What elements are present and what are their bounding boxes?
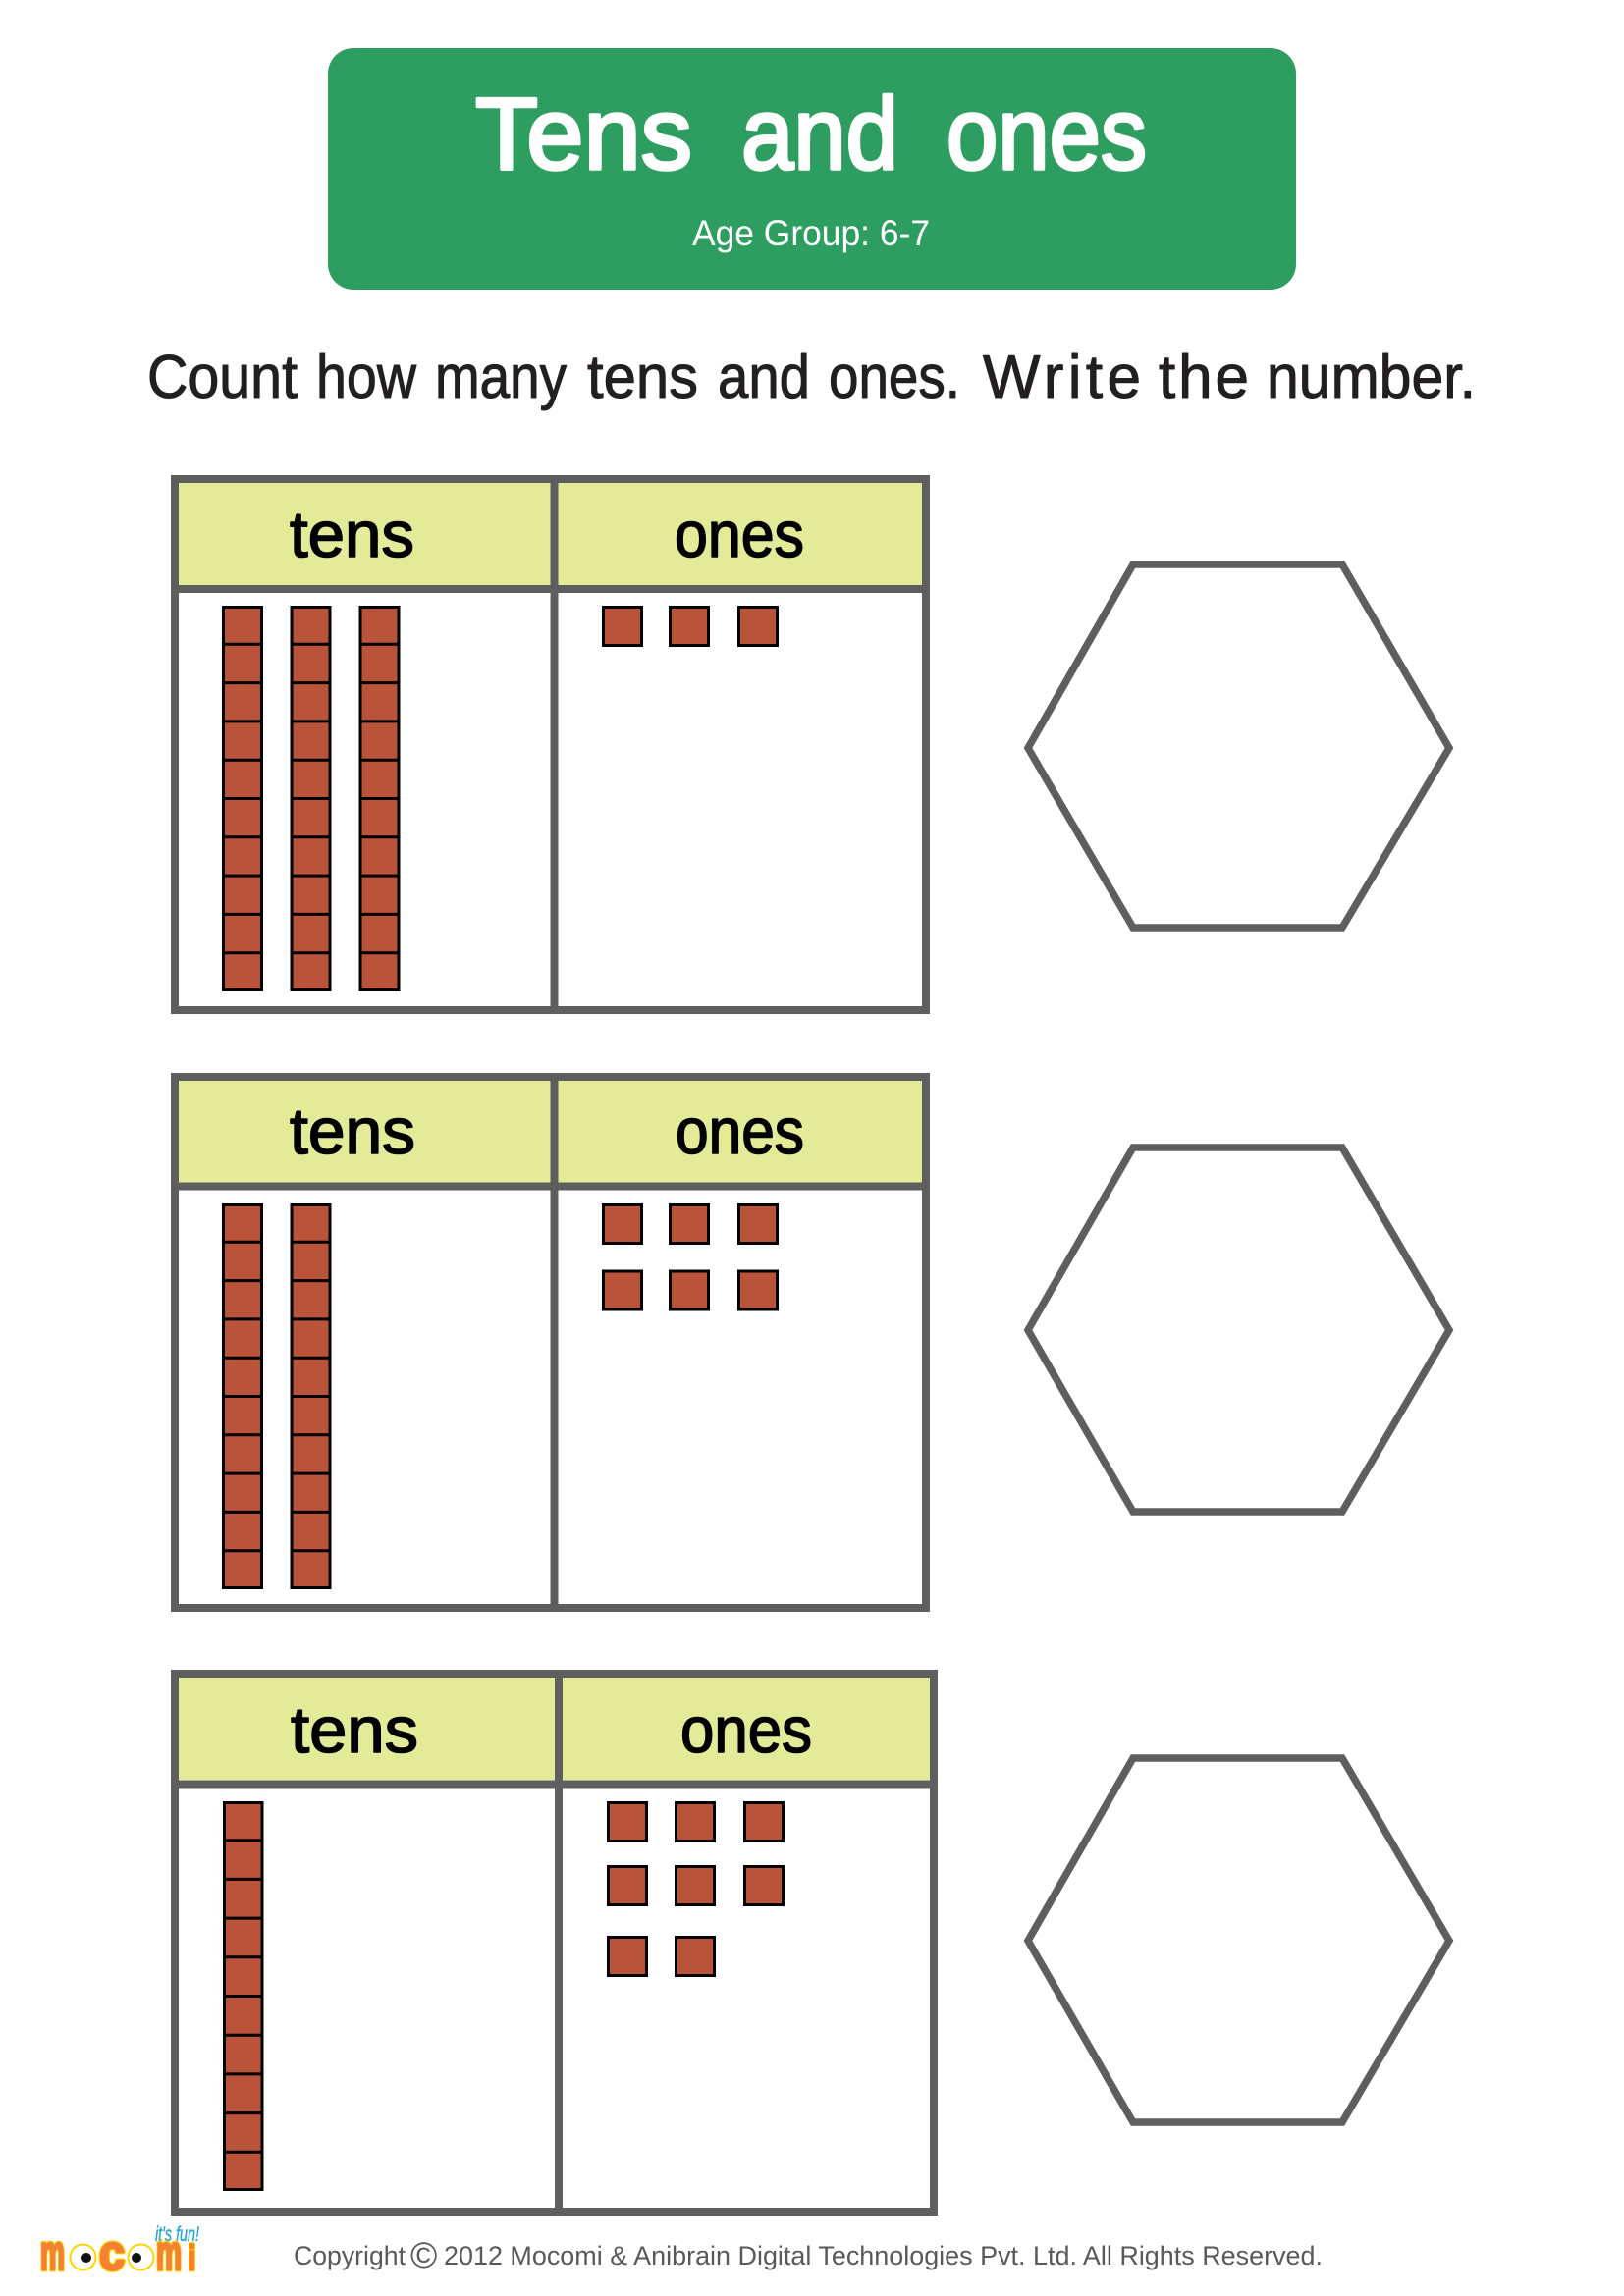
title: ones [947,78,1147,191]
tens rod 2 [291,1205,332,1588]
answer hexagon 2 [1028,1148,1449,1512]
heading: ones: ones [676,1095,804,1167]
header: tens and ones band [179,483,926,585]
logo letters: m [40,2225,65,2280]
age group subtitle: Age Group: 6-7 [692,213,930,253]
title: Tens [475,78,692,191]
header: tens and ones band [179,1081,926,1183]
answer hexagon 3 [1028,1758,1449,2122]
logo letters: m [40,2225,65,2280]
header: tens and ones band [179,1678,934,1780]
instruction text [147,344,1476,411]
title: and [741,78,898,191]
heading: tens: tens [290,498,414,570]
table frame [171,479,930,1010]
title [475,78,1147,191]
instruction text: many [435,344,567,411]
heading: tens: tens [290,1095,415,1167]
copyright footer: © [410,2235,437,2275]
ones blocks [603,607,778,646]
instruction text: tens [587,344,698,411]
copyright footer [294,2235,1323,2275]
heading: ones: ones [675,498,804,570]
table frame [171,1077,930,1608]
instruction text: the [1159,344,1249,411]
logo letters: i [189,2239,195,2277]
tens rod 1 [222,1205,263,1588]
tens rod [223,1802,263,2189]
answer hexagon 1 [1028,564,1449,928]
instruction text: Write [983,344,1141,411]
tens rod 1 [222,607,263,989]
logo letters: c [99,2225,125,2280]
tagline: it's fun! [155,2223,199,2246]
ones blocks [603,1205,778,1309]
ones blocks [609,1802,784,1975]
table frame [171,1674,938,2212]
tens rod 3 [359,607,401,989]
logo letters: c [99,2225,125,2280]
panel: place value table 1 [171,479,930,1010]
eye left [71,2244,96,2269]
instruction text: and [718,344,810,411]
eye right [128,2244,153,2269]
panel: place value table 3 [171,1674,938,2212]
title banner [328,48,1296,290]
heading: ones: ones [680,1693,812,1766]
logo letters [40,2225,195,2280]
heading: tens: tens [291,1693,418,1766]
instruction text: ones. [829,344,960,411]
panel: place value table 2 [171,1077,930,1608]
copyright footer: Copyright [294,2241,406,2270]
copyright footer: 2012 Mocomi & Anibrain Digital Technologies Pvt. Ltd. All Rights Reserved. [444,2241,1323,2270]
logo letters: m [156,2225,182,2280]
instruction text: Count [147,344,298,411]
instruction text: how [316,344,416,411]
tens rod 2 [291,607,332,989]
logo: Mocomi [40,2223,199,2280]
logo letters: i [189,2239,195,2277]
instruction text: number. [1267,344,1476,411]
logo letters: m [156,2225,182,2280]
